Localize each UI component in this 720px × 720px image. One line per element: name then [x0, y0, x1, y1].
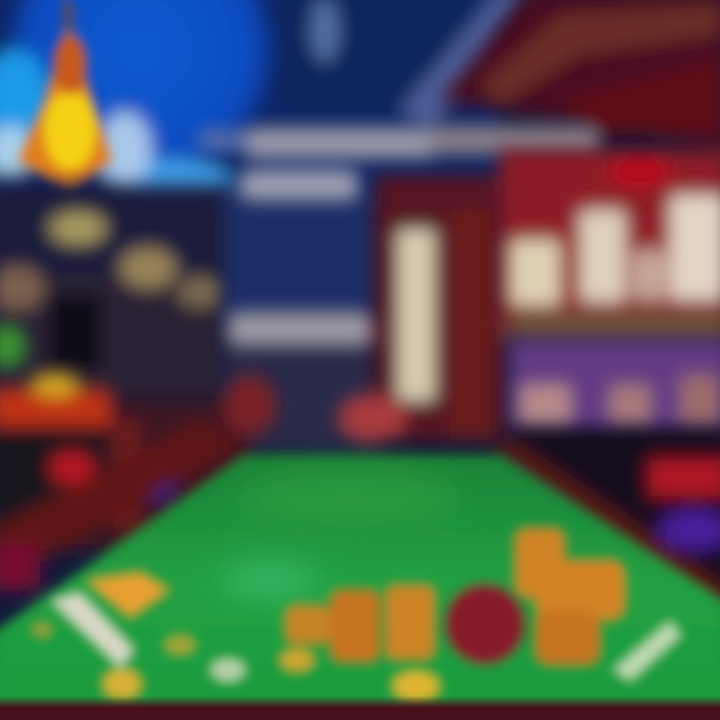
heading accent left	[198, 130, 248, 150]
icon: orange chip stacks	[279, 585, 440, 702]
headline blur bars	[198, 126, 600, 346]
panel: left gaming table	[0, 373, 276, 590]
panel: maroon pillar section	[338, 175, 505, 442]
icon: white chips on felt	[612, 620, 682, 682]
heading line one	[245, 128, 435, 158]
panel: red and white slot wall	[500, 150, 720, 340]
panel: green felt table	[0, 455, 720, 715]
icon: playing cards	[32, 572, 246, 700]
panel: night sky	[0, 0, 530, 210]
heading line two	[240, 170, 358, 200]
subheading extension	[375, 322, 505, 342]
panel: central navy wall	[225, 190, 375, 450]
bottom rail	[0, 696, 720, 720]
felt highlights	[220, 472, 460, 596]
panel: maroon ceiling	[440, 0, 720, 150]
icon: flaming tower	[18, 0, 112, 190]
panel: left buildings	[0, 185, 230, 400]
panel: right dark floor	[490, 430, 720, 620]
icon: tall orange chip stack	[515, 528, 625, 665]
icon: red chip stack	[445, 584, 525, 664]
panel: purple machines	[510, 340, 720, 430]
subheading	[228, 312, 373, 346]
heading line one continuation	[430, 126, 600, 154]
